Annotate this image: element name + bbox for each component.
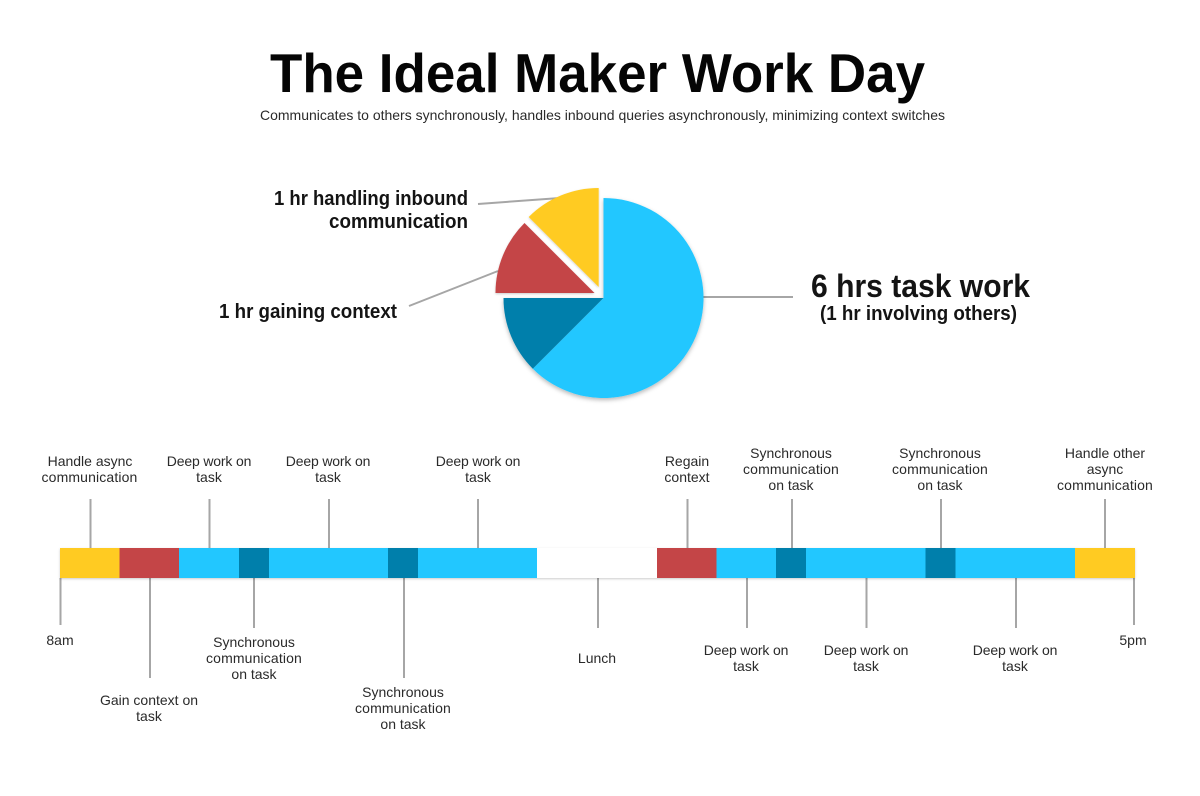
pie label: inbound communication: 1 hr handling inbound: [274, 188, 468, 210]
leader lines: [409, 198, 793, 306]
timeline labels below: on task: [231, 666, 278, 682]
pie label: task work: (1 hr involving others): [820, 303, 1017, 325]
timeline labels above: context: [664, 469, 710, 485]
timeline labels above: Handle async: [48, 453, 132, 469]
pie label: inbound communication: [274, 188, 468, 233]
timeline labels above: on task: [768, 477, 815, 493]
timeline labels above: task: [196, 469, 223, 485]
timeline labels above: communication: [1057, 477, 1153, 493]
title: The Ideal Maker Work Day: [270, 42, 925, 104]
timeline labels below: 8am: [46, 632, 74, 648]
timeline labels below: task: [733, 658, 760, 674]
timeline labels below: Gain context on: [100, 692, 198, 708]
timeline labels below: on task: [380, 716, 427, 732]
timeline labels above: communication: [42, 469, 137, 485]
timeline labels above: communication: [743, 461, 839, 477]
pie label: inbound communication: communication: [329, 211, 468, 233]
timeline labels above: Deep work on: [286, 453, 370, 469]
pie slice: gaining context: [496, 223, 594, 293]
pie slice: involving others: [504, 298, 604, 369]
timeline labels above: communication: [892, 461, 988, 477]
timeline labels below: Deep work on: [704, 642, 788, 658]
timeline connector lines: [60, 499, 1134, 678]
timeline labels below: 5pm: [1119, 632, 1147, 648]
timeline labels below: Lunch: [578, 650, 616, 666]
timeline labels above: Handle other: [1065, 445, 1145, 461]
timeline labels below: [46, 632, 1147, 732]
timeline labels below: task: [853, 658, 880, 674]
timeline labels above: task: [465, 469, 492, 485]
pie chart: [409, 188, 793, 398]
timeline labels above: [42, 445, 1153, 493]
pie body: [504, 198, 704, 398]
timeline bar: [60, 548, 1135, 578]
pie label: task work: 6 hrs task work: [811, 268, 1030, 304]
timeline labels below: task: [136, 708, 163, 724]
timeline labels above: Synchronous: [750, 445, 832, 461]
timeline labels above: Regain: [665, 453, 709, 469]
timeline labels above: on task: [917, 477, 964, 493]
pie slice: task work: [533, 198, 704, 398]
timeline labels below: Synchronous: [362, 684, 444, 700]
subtitle: Communicates to others synchronously, handles inbound queries asynchronously, minimizing context switches: [260, 107, 945, 123]
timeline labels above: task: [315, 469, 342, 485]
timeline labels above: Synchronous: [899, 445, 981, 461]
timeline labels below: Synchronous: [213, 634, 295, 650]
timeline labels below: communication: [206, 650, 302, 666]
timeline labels above: Deep work on: [436, 453, 520, 469]
timeline labels above: Deep work on: [167, 453, 251, 469]
timeline labels below: Deep work on: [824, 642, 908, 658]
timeline labels below: task: [1002, 658, 1029, 674]
timeline labels below: Deep work on: [973, 642, 1057, 658]
pie label: task work: [811, 268, 1030, 325]
timeline labels above: async: [1087, 461, 1123, 477]
pie label: gaining context: 1 hr gaining context: [219, 301, 397, 323]
timeline labels below: communication: [355, 700, 451, 716]
pie slice: inbound communication: [529, 188, 599, 287]
